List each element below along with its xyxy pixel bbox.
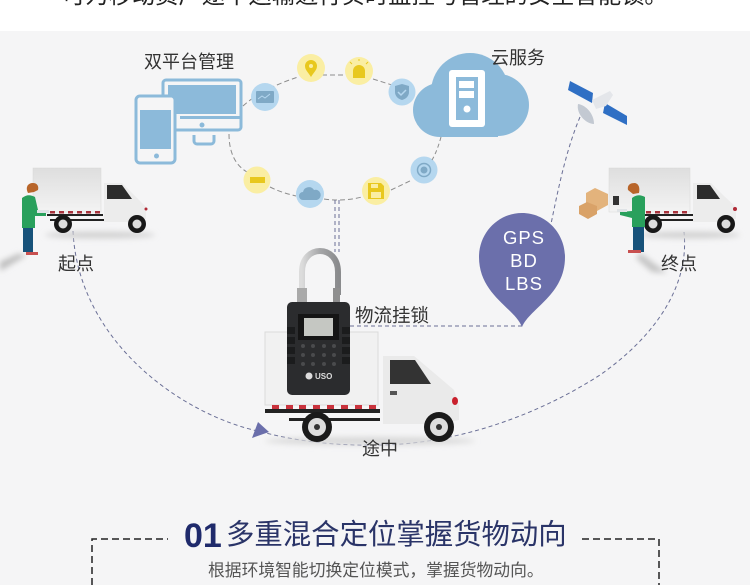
figure: worker start [0,183,49,271]
subheading text: 根据环境智能切换定位模式，掌握货物动向。 [208,561,544,580]
label: end: 终点 [661,254,697,274]
label: cloud service: 云服务 [491,48,545,68]
icon: monitor and phone [136,80,241,163]
icon: location pin: LBS [505,273,543,294]
icon: location pin: BD [510,250,538,271]
icon: battery bubble [244,166,270,194]
icon: floppy bubble [362,177,390,205]
icon: location pin: GPS [503,227,545,248]
label: dual platform: 双平台管理 [144,52,234,72]
icon: map pin bubble [297,54,325,82]
icon: shield bubble [388,78,416,106]
figure: worker end [617,183,667,273]
icon: chart bubble [251,83,279,111]
icon: logistics padlock [287,251,350,395]
truck: en route [265,332,475,445]
heading: 多重混合定位掌握货物动向 [226,519,567,551]
icon: parcels [579,188,619,219]
label: padlock: 物流挂锁 [355,305,429,326]
truck: start [33,168,155,238]
icon: logistics padlock: USO [315,372,332,381]
label: en route: 途中 [362,439,398,459]
truck: end [609,168,740,238]
label: start: 起点 [58,254,94,274]
dashed frame [92,539,659,585]
icon: alarm bubble [345,57,373,85]
connector lines [73,117,685,445]
icon: target bubble [410,156,438,184]
icon: cloud bubble [296,180,324,208]
platform ring dashed path [229,75,412,200]
heading: 01 [184,517,222,555]
icon: cloud service [413,53,529,137]
arrow: route direction [252,422,269,438]
icon: satellite [568,81,627,125]
icon: location pin [479,213,565,327]
